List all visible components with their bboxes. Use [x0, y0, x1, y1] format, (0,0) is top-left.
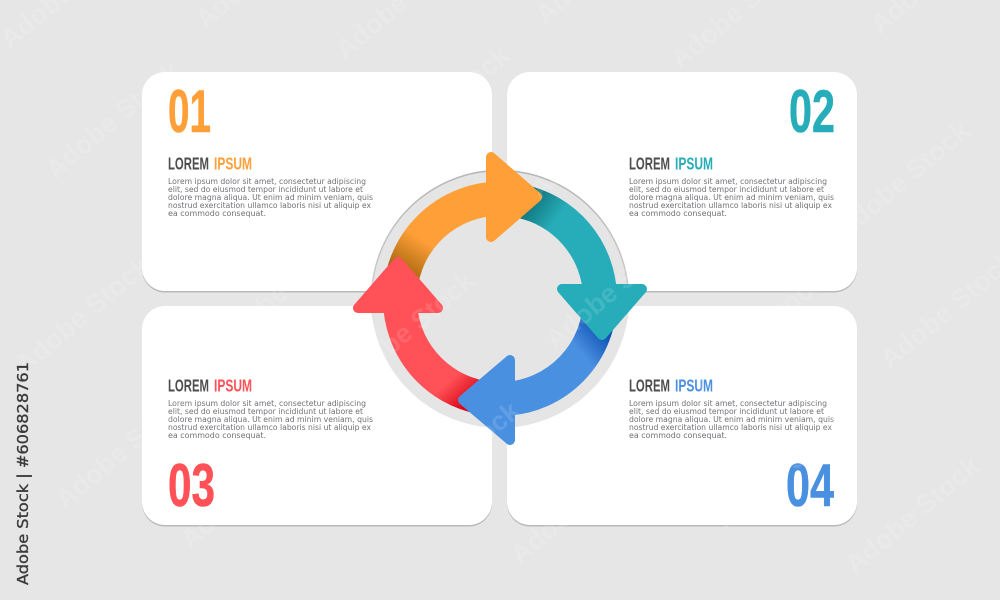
body text 01: elit, sed do eiusmod tempor incididunt ut labore et [168, 185, 363, 194]
body text 01 [168, 177, 373, 218]
body text 03: Lorem ipsum dolor sit amet, consectetur adipiscing [168, 399, 366, 408]
heading 02: IPSUM [675, 154, 713, 174]
arrowhead: blue [463, 360, 510, 440]
watermark pattern: Adobe Stock [210, 225, 356, 355]
watermark pattern: Adobe Stock [710, 405, 856, 535]
watermark pattern: Adobe Stock [335, 265, 481, 395]
panel: step 04 [507, 306, 857, 526]
heading 04: IPSUM [675, 376, 713, 396]
body text 02: elit, sed do eiusmod tempor incididunt ut labore et [629, 185, 824, 194]
body text 03: ea commodo consequat. [168, 431, 266, 440]
heading 01: LOREM [168, 154, 209, 174]
body text 02: dolore magna aliqua. Ut enim ad minim veniam, quis [629, 193, 834, 202]
watermark pattern: Adobe Stock [840, 450, 986, 580]
number 01: 01 [168, 78, 211, 145]
arrowhead: orange [491, 157, 537, 237]
body text 01: dolore magna aliqua. Ut enim ad minim veniam, quis [168, 193, 373, 202]
panel: step 03 [142, 306, 492, 526]
cycle diagram [358, 157, 642, 440]
arc: teal [520, 201, 600, 295]
heading 03: LOREM [168, 376, 209, 396]
number 04: 04 [786, 452, 834, 519]
stock credit: Adobe Stock | #606828761 [14, 362, 32, 585]
body text 02 [629, 177, 834, 218]
body text 04: elit, sed do eiusmod tempor incididunt ut labore et [629, 407, 824, 416]
body text 04: Lorem ipsum dolor sit amet, consectetur adipiscing [629, 399, 827, 408]
watermark pattern: Adobe Stock [175, 425, 321, 555]
watermark pattern: Adobe Stock [685, 265, 831, 395]
panel: step 02 [507, 72, 857, 292]
heading 04: LOREM [629, 376, 670, 396]
watermark pattern: Adobe Stock [50, 385, 196, 515]
body text 02: ea commodo consequat. [629, 209, 727, 218]
watermark pattern: Adobe Stock [540, 225, 686, 355]
body text 01: nostrud exercitation ullamco laboris nisi ut aliquip ex [168, 201, 371, 210]
number 03: 03 [168, 452, 215, 519]
body text 02: Lorem ipsum dolor sit amet, consectetur adipiscing [629, 177, 827, 186]
body text 01: Lorem ipsum dolor sit amet, consectetur adipiscing [168, 177, 366, 186]
watermark pattern: Adobe Stock [505, 440, 651, 570]
central gray disc [371, 170, 629, 428]
watermark pattern: Adobe Stock [370, 40, 516, 170]
watermark pattern: Adobe Stock [525, 75, 671, 205]
body text 04 [629, 399, 834, 440]
arrowhead: teal [562, 289, 642, 335]
panel: step 01 [142, 72, 492, 292]
heading 01: IPSUM [214, 154, 252, 174]
arc: orange [400, 199, 492, 299]
arrowhead: red [358, 262, 438, 308]
arc: red [400, 300, 482, 398]
watermark pattern: Adobe Stock [830, 115, 976, 245]
heading 02: LOREM [629, 154, 670, 174]
watermark pattern: Adobe Stock [40, 55, 186, 185]
body text 03 [168, 399, 373, 440]
body text 03: nostrud exercitation ullamco laboris nisi ut aliquip ex [168, 423, 371, 432]
watermark pattern: Adobe Stock [10, 250, 156, 380]
body text 03: elit, sed do eiusmod tempor incididunt ut labore et [168, 407, 363, 416]
arc: blue [505, 299, 600, 399]
number 02: 02 [789, 78, 835, 145]
body text 04: ea commodo consequat. [629, 431, 727, 440]
body text 03: dolore magna aliqua. Ut enim ad minim veniam, quis [168, 415, 373, 424]
watermark pattern: Adobe Stock [380, 395, 526, 525]
body text 02: nostrud exercitation ullamco laboris nisi ut aliquip ex [629, 201, 832, 210]
body text 04: nostrud exercitation ullamco laboris nisi ut aliquip ex [629, 423, 832, 432]
body text 04: dolore magna aliqua. Ut enim ad minim veniam, quis [629, 415, 834, 424]
heading 03: IPSUM [214, 376, 252, 396]
body text 01: ea commodo consequat. [168, 209, 266, 218]
